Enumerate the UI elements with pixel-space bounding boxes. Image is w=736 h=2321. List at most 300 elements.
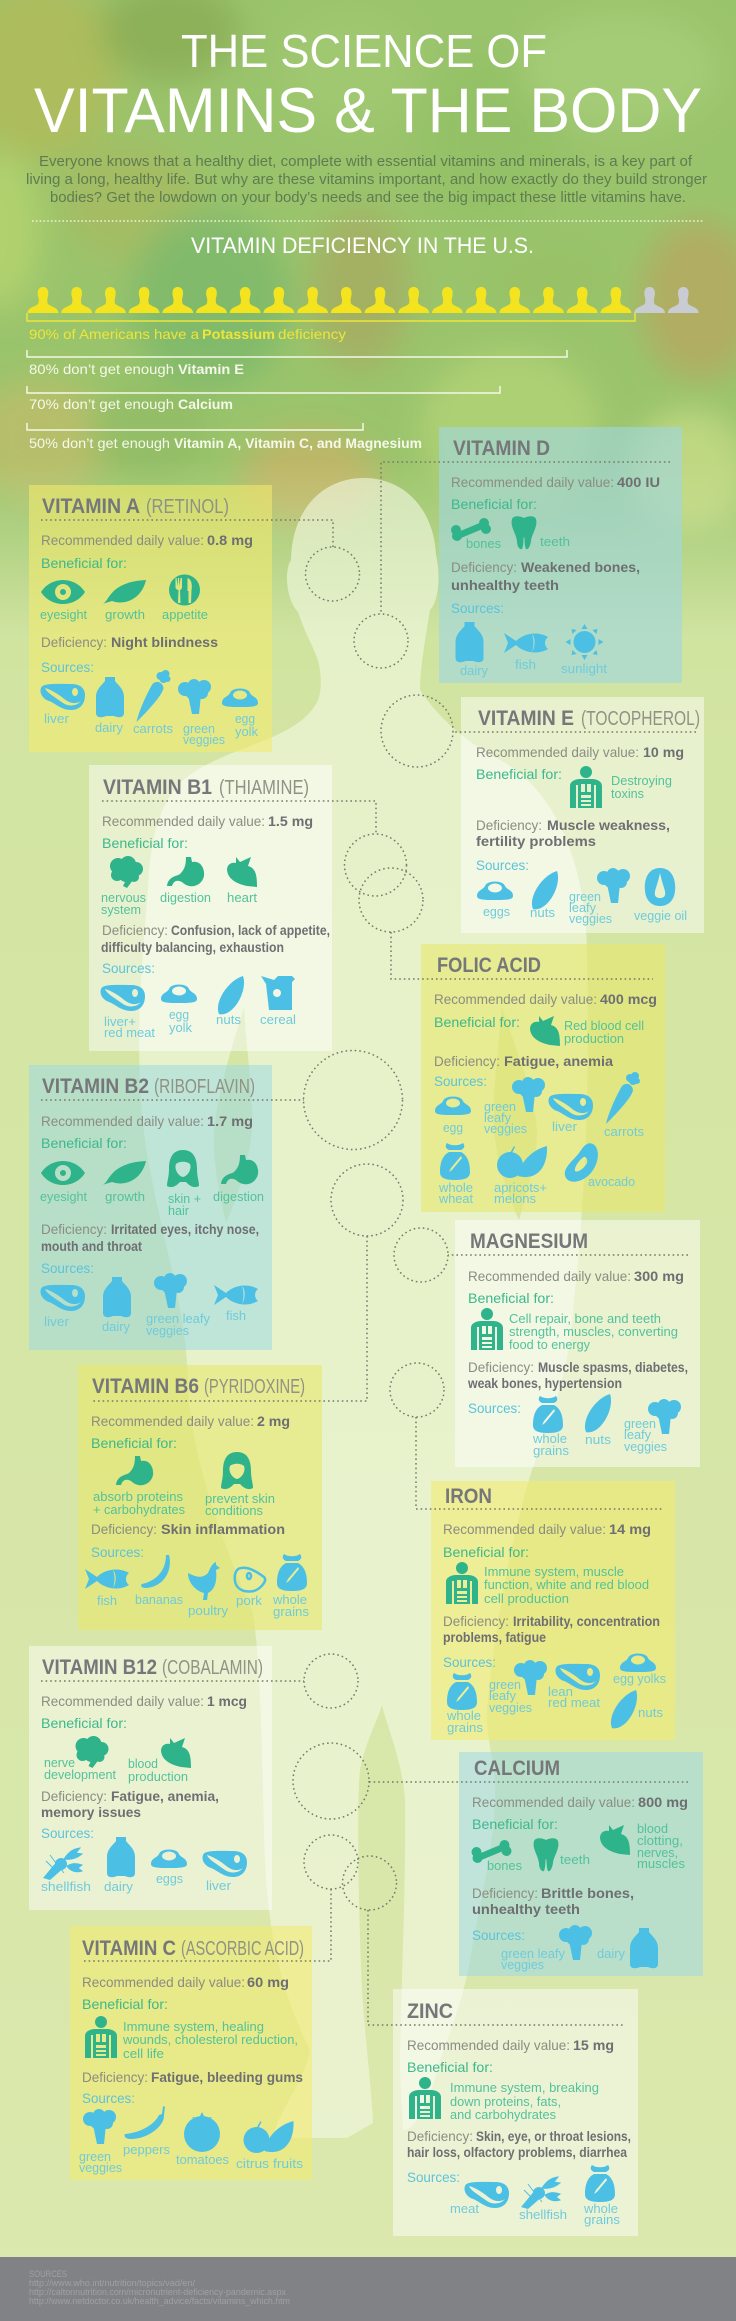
icon: green leafy veggies: green — [484, 1099, 516, 1114]
deficiency — [451, 559, 640, 593]
footer sources: http://caltonnutrition.com/micronutrient-deficiency-pandemic.aspx — [29, 2287, 286, 2297]
title: THE SCIENCE OF — [181, 25, 547, 77]
sources — [434, 1072, 644, 1206]
icon: bones — [472, 1840, 522, 1873]
icon: peppers: peppers — [123, 2142, 170, 2157]
icon: poultry: poultry — [188, 1603, 228, 1618]
benefits — [472, 1816, 685, 1873]
intro text — [26, 153, 707, 206]
recommended value: 0.8 mg — [207, 532, 253, 548]
icon: shellfish: shellfish — [41, 1879, 91, 1894]
icon: pork — [235, 1568, 265, 1608]
benefit text: down proteins, fats, — [450, 2094, 561, 2109]
icon: blood production: production — [128, 1769, 188, 1784]
benefits: Beneficial for: — [82, 1996, 168, 2012]
icon: apricots and melons — [494, 1146, 547, 1206]
icon: avocado — [565, 1143, 635, 1189]
benefits: Beneficial for: — [434, 1014, 520, 1030]
icon: liver — [40, 684, 85, 726]
deficiency — [41, 1788, 219, 1820]
benefits: Beneficial for: — [102, 835, 188, 851]
heading: CALCIUM — [474, 1757, 560, 1780]
deficiency: Deficiency: — [476, 817, 542, 833]
icon: shellfish: shellfish — [519, 2207, 567, 2222]
icon: apricots and melons: apricots+ — [494, 1180, 547, 1195]
benefit text: Red blood cell — [564, 1018, 644, 1033]
icon: bananas: bananas — [135, 1592, 183, 1607]
icon: green leafy veggies — [146, 1273, 210, 1338]
icon: body organs — [85, 2016, 117, 2058]
icon: green leafy veggies: leafy — [569, 900, 596, 915]
recommended value: Recommended daily value: — [41, 1113, 204, 1129]
icon: growth — [102, 1161, 146, 1204]
icon: whole grains: whole — [583, 2201, 618, 2216]
benefit text: and carbohydrates — [450, 2107, 556, 2122]
icon: blood clotting, nerves, muscles: muscles — [637, 1856, 685, 1871]
deficiency — [476, 817, 670, 849]
icon: prevent skin conditions: conditions — [205, 1503, 263, 1518]
recommended value: 400 mcg — [600, 991, 657, 1007]
icon: liver and red meat — [100, 985, 155, 1040]
icon: green leafy veggies: leafy — [484, 1110, 511, 1125]
benefit text: cell life — [123, 2046, 164, 2061]
icon: blood clotting, nerves, muscles: nerves, — [637, 1845, 678, 1860]
icon: liver and red meat: red meat — [104, 1025, 155, 1040]
icon: nuts: nuts — [638, 1705, 664, 1720]
benefit text — [564, 1018, 644, 1046]
deficiency: Night blindness — [111, 634, 218, 650]
deficiency — [472, 1885, 634, 1917]
footer sources — [29, 2269, 290, 2306]
icon: pork: pork — [236, 1593, 263, 1608]
recommended value: Recommended daily value: — [41, 1693, 204, 1709]
heading: (TOCOPHEROL) — [581, 708, 700, 730]
benefit text: food to energy — [509, 1337, 590, 1352]
recommended value: Recommended daily value: — [476, 744, 639, 760]
icon: egg yolk: yolk — [235, 724, 258, 739]
icon: body organs — [409, 2077, 441, 2119]
panel: vitamin B12 — [29, 1646, 272, 1910]
icon: cereal: cereal — [260, 1012, 296, 1027]
icon: liver: liver — [206, 1878, 232, 1893]
benefit text — [484, 1564, 649, 1606]
benefits — [40, 1135, 264, 1218]
icon: whole grains — [446, 1673, 483, 1735]
recommended value: Recommended daily value: — [472, 1794, 635, 1810]
benefit text: Cell repair, bone and teeth — [509, 1311, 661, 1326]
icon: liver and red meat: liver+ — [104, 1014, 136, 1029]
deficiency: Deficiency: — [451, 559, 517, 575]
intro text: Everyone knows that a healthy diet, complete with essential vitamins and minerals, is a key part of — [39, 153, 693, 170]
stat: 80% vitamin E: Vitamin E — [178, 361, 244, 377]
benefit text: strength, muscles, converting — [509, 1324, 678, 1339]
icon: green veggies — [79, 2109, 122, 2175]
icon: eggs: eggs — [156, 1871, 183, 1886]
dotted connectors and body-point circles — [41, 462, 696, 2025]
icon: green veggies — [178, 679, 225, 747]
icon: egg — [435, 1096, 471, 1135]
icon: skin and hair: skin + — [168, 1191, 201, 1206]
icon: liver: liver — [552, 1119, 578, 1134]
sources: Sources: — [41, 1825, 94, 1841]
icon: absorb proteins and carbohydrates: + carbohydrates — [93, 1502, 185, 1517]
icon: nerve development: nerve — [44, 1755, 75, 1770]
panel: vitamin B1 — [89, 765, 332, 1051]
panel: vitamin D — [439, 427, 682, 683]
heading: VITAMIN B6 — [92, 1375, 199, 1398]
panel: folic acid — [421, 944, 665, 1212]
stat: 70% calcium — [27, 386, 500, 412]
icon: nuts — [585, 1394, 612, 1447]
heading — [92, 1375, 305, 1398]
icon: dairy: dairy — [460, 663, 488, 678]
icon: green leafy veggies — [624, 1399, 681, 1454]
sources — [40, 659, 258, 747]
stat: 70% calcium: Calcium — [178, 396, 233, 412]
heading: (COBALAMIN) — [162, 1657, 263, 1679]
icon: eggs — [477, 882, 513, 919]
heading — [42, 495, 229, 518]
icon: green leafy veggies — [489, 1660, 547, 1715]
icon: fish: fish — [515, 657, 536, 672]
deficiency: Deficiency: — [407, 2128, 473, 2144]
icon: nuts: nuts — [216, 1012, 242, 1027]
sources — [472, 1925, 658, 1972]
sources — [100, 960, 296, 1040]
heading — [478, 707, 700, 730]
deficiency: Deficiency: — [434, 1053, 500, 1069]
benefit text — [611, 773, 672, 801]
deficiency — [91, 1521, 285, 1537]
deficiency: fertility problems — [476, 833, 596, 849]
heading — [82, 1937, 304, 1960]
recommended value: 1.7 mg — [207, 1113, 253, 1129]
deficiency: Muscle weakness, — [547, 817, 670, 833]
sources — [443, 1654, 666, 1735]
heading: (ASCORBIC ACID) — [181, 1938, 304, 1960]
icon: carrots: carrots — [133, 721, 173, 736]
recommended value: 300 mg — [634, 1268, 684, 1284]
icon: liver — [40, 1285, 85, 1329]
benefit text — [122, 2019, 298, 2061]
icon: green leafy veggies: green leafy — [146, 1311, 210, 1326]
sources: Sources: — [476, 857, 529, 873]
icon: cereal — [260, 976, 296, 1027]
title: VITAMINS & THE BODY — [34, 76, 702, 146]
sources — [41, 1825, 247, 1894]
heading: (RIBOFLAVIN) — [154, 1076, 255, 1098]
icon: nervous system: system — [101, 902, 141, 917]
icon: meat: meat — [450, 2201, 479, 2216]
benefit text: wounds, cholesterol reduction, — [122, 2032, 298, 2047]
icon: whole grains: whole — [446, 1708, 481, 1723]
icon: digestion — [213, 1155, 264, 1204]
deficiency: Weakened bones, — [521, 559, 640, 575]
heading — [42, 1656, 263, 1679]
recommended value: 400 IU — [617, 474, 660, 490]
deficiency: Deficiency: — [82, 2069, 148, 2085]
icon: digestion — [160, 857, 211, 905]
deficiency: problems, fatigue — [443, 1629, 546, 1645]
icon: sunlight — [561, 624, 607, 676]
icon: blood production — [128, 1738, 191, 1784]
icon: teeth — [534, 1838, 590, 1871]
icon: whole grains: grains — [447, 1720, 483, 1735]
recommended value: Recommended daily value: — [91, 1413, 254, 1429]
deficiency: Deficiency: — [41, 634, 107, 650]
heading — [42, 1075, 255, 1098]
icon: eyesight: eyesight — [40, 1189, 87, 1204]
benefits — [40, 555, 208, 622]
icon: meat — [450, 2182, 509, 2216]
recommended value: 1.5 mg — [268, 813, 313, 829]
icon: teeth: teeth — [540, 534, 570, 549]
deficiency — [407, 2128, 631, 2160]
icon: appetite — [162, 574, 208, 622]
recommended value: Recommended daily value: — [41, 532, 204, 548]
icon: growth: growth — [105, 1189, 145, 1204]
deficiency: Deficiency: — [41, 1221, 107, 1237]
icon: eggs: eggs — [483, 904, 510, 919]
recommended value: Recommended daily value: — [102, 813, 265, 829]
deficiency: Muscle spasms, diabetes, — [538, 1359, 688, 1375]
stat: 50% vitamins A, C, magnesium: Vitamin A, Vitamin C, and Magnesium — [174, 435, 422, 451]
icon: blood clotting, nerves, muscles: clotting, — [637, 1833, 683, 1848]
sources — [468, 1394, 681, 1458]
icon: whole wheat — [438, 1143, 473, 1206]
benefits: Beneficial for: — [451, 496, 537, 512]
panel: vitamin B2 — [29, 1065, 272, 1350]
icon: whole wheat: whole — [438, 1180, 473, 1195]
panel: vitamin B6 — [78, 1365, 322, 1630]
heading: VITAMIN E — [478, 707, 574, 730]
heading: ZINC — [407, 2000, 453, 2023]
heading: VITAMIN B12 — [42, 1656, 157, 1679]
icon: veggie oil: veggie oil — [634, 908, 687, 923]
icon: growth: growth — [105, 607, 145, 622]
benefits: Beneficial for: — [41, 1715, 127, 1731]
icon: skin and hair: hair — [168, 1203, 190, 1218]
icon: blood clotting, nerves, muscles: blood — [637, 1821, 668, 1836]
icon: peppers — [123, 2106, 170, 2157]
intro text: bodies? Get the lowdown on your body’s needs and see the big impact these little vitamins have. — [50, 189, 686, 206]
icon: growth — [102, 580, 146, 622]
icon: dairy: dairy — [95, 720, 123, 735]
recommended value: 1 mcg — [207, 1693, 247, 1709]
benefits: Beneficial for: — [476, 766, 562, 782]
benefits — [101, 835, 257, 917]
icon: bananas — [135, 1555, 183, 1607]
stat: 80% vitamin E: 80% don’t get enough — [29, 361, 174, 377]
benefits: Beneficial for: — [443, 1544, 529, 1560]
icon: eyesight — [40, 580, 87, 622]
sources: Sources: — [468, 1400, 521, 1416]
heading: (RETINOL) — [146, 496, 229, 518]
icon: heart: heart — [227, 890, 257, 905]
icon: eyesight: eyesight — [40, 607, 87, 622]
sources — [40, 1260, 258, 1338]
panel: magnesium — [455, 1220, 700, 1467]
icon: green leafy veggies: green — [489, 1677, 521, 1692]
benefits: Beneficial for: — [91, 1435, 177, 1451]
footer sources: http://www.netdoctor.co.uk/health_advice/facts/vitamins_which.htm — [29, 2296, 290, 2306]
icon: nervous system: nervous — [101, 890, 146, 905]
icon: veggie oil — [634, 868, 687, 923]
sources: Sources: — [434, 1073, 487, 1089]
icon: egg yolk: egg — [169, 1007, 189, 1022]
icon: egg: egg — [443, 1120, 463, 1135]
sources: Sources: — [102, 960, 155, 976]
icon: dairy — [456, 622, 488, 678]
deficiency — [41, 634, 218, 650]
sources: Sources: — [407, 2169, 460, 2185]
section heading: VITAMIN DEFICIENCY IN THE U.S. — [191, 233, 534, 258]
icon: carrots — [133, 670, 173, 736]
heading: VITAMIN B1 — [103, 776, 212, 799]
benefits: Beneficial for: — [41, 1135, 127, 1151]
benefit text: Immune system, muscle — [484, 1564, 624, 1579]
icon: apricots and melons: melons — [494, 1191, 536, 1206]
panel: calcium — [459, 1752, 703, 1976]
stat: 50% vitamins A, C, magnesium — [27, 423, 422, 451]
benefit text: Immune system, breaking — [450, 2080, 599, 2095]
icon: absorb proteins and carbohydrates — [93, 1456, 185, 1517]
icon: dairy — [104, 1837, 135, 1894]
heading: VITAMIN B2 — [42, 1075, 149, 1098]
heading: (PYRIDOXINE) — [204, 1376, 305, 1398]
icon: citrus fruits: citrus fruits — [236, 2156, 304, 2171]
panel: zinc — [393, 1989, 638, 2236]
body silhouette — [139, 478, 588, 2138]
heading: MAGNESIUM — [470, 1230, 588, 1253]
intro text: living a long, healthy life. But why are these vitamins important, and how exactly do they build stronger — [26, 171, 707, 188]
icon: green leafy veggies: veggies — [624, 1439, 667, 1454]
icon: liver — [548, 1094, 593, 1134]
icon: fish — [504, 633, 548, 672]
benefits — [468, 1290, 678, 1352]
benefit text: Destroying — [611, 773, 672, 788]
deficiency: Deficiency: — [443, 1613, 509, 1629]
icon: whole grains — [532, 1396, 569, 1458]
icon: dairy — [597, 1928, 658, 1968]
icon: bones: bones — [466, 536, 501, 551]
benefit text: function, white and red blood — [484, 1577, 649, 1592]
sources — [85, 1544, 309, 1619]
icon: nuts — [611, 1690, 664, 1728]
recommended value: Recommended daily value: — [443, 1521, 606, 1537]
icon: heart — [227, 857, 257, 905]
stat: 90% potassium: deficiency — [278, 326, 346, 342]
icon: green leafy veggies: green leafy — [501, 1946, 565, 1961]
icon: body organs — [570, 766, 602, 808]
icon: prevent skin conditions — [205, 1452, 275, 1518]
deficiency: Skin inflammation — [161, 1521, 285, 1537]
deficiency — [101, 922, 330, 955]
icon: whole grains: grains — [273, 1604, 309, 1619]
sources: Sources: — [82, 2090, 135, 2106]
icon: liver: liver — [44, 711, 70, 726]
heading: (THIAMINE) — [219, 777, 309, 799]
deficiency: Irritated eyes, itchy nose, — [111, 1221, 259, 1237]
icon: green leafy veggies: green — [569, 889, 601, 904]
recommended value: Recommended daily value: — [451, 474, 614, 490]
deficiency: Fatigue, anemia — [504, 1053, 613, 1069]
recommended value: 10 mg — [643, 744, 684, 760]
icon: nervous system — [101, 856, 146, 917]
icon: green leafy veggies: leafy — [624, 1427, 651, 1442]
deficiency: unhealthy teeth — [472, 1901, 580, 1917]
deficiency: Deficiency: — [472, 1885, 538, 1901]
icon: blood production: blood — [128, 1756, 158, 1771]
benefits — [91, 1435, 275, 1518]
deficiency: difficulty balancing, exhaustion — [101, 939, 284, 955]
benefit text: production — [564, 1031, 624, 1046]
benefits — [82, 1996, 298, 2061]
stat: 50% vitamins A, C, magnesium: 50% don’t get enough — [29, 435, 170, 451]
sources: Sources: — [41, 1260, 94, 1276]
icon: lean red meat: red meat — [548, 1695, 600, 1710]
recommended value: 15 mg — [573, 2037, 614, 2053]
icon: teeth: teeth — [560, 1852, 590, 1867]
icon: carrots: carrots — [604, 1124, 644, 1139]
benefit text — [450, 2080, 599, 2122]
benefits: Beneficial for: — [468, 1290, 554, 1306]
icon: body organs — [446, 1562, 478, 1604]
panel: vitamin C — [70, 1926, 312, 2180]
recommended value: 2 mg — [257, 1413, 290, 1429]
icon: egg yolk — [222, 688, 258, 739]
benefit text: cell production — [484, 1591, 569, 1606]
recommended value: 60 mg — [247, 1974, 289, 1990]
icon: egg yolk: yolk — [169, 1020, 192, 1035]
icon: egg yolks — [613, 1654, 666, 1686]
icon: eyesight — [40, 1161, 87, 1204]
icon: poultry — [188, 1562, 228, 1618]
deficiency — [434, 1053, 613, 1069]
stat: 80% vitamin E — [27, 350, 567, 377]
stat: 70% calcium: 70% don’t get enough — [29, 396, 174, 412]
icon: lean red meat: lean — [548, 1684, 573, 1699]
deficiency: Deficiency: — [102, 922, 168, 938]
icon: fish: fish — [97, 1593, 117, 1608]
icon: egg yolk: egg — [235, 711, 255, 726]
icon: fish: fish — [226, 1308, 246, 1323]
icon: tomatoes: tomatoes — [176, 2152, 229, 2167]
sources — [407, 2165, 620, 2227]
deficiency: Deficiency: — [468, 1359, 534, 1375]
icon: nuts: nuts — [585, 1432, 612, 1447]
deficiency — [443, 1613, 660, 1645]
icon: dairy — [95, 677, 124, 735]
icon: egg yolk — [161, 984, 197, 1035]
recommended value: 14 mg — [609, 1521, 651, 1537]
icon: appetite: appetite — [162, 607, 208, 622]
icon: dairy — [102, 1277, 131, 1334]
deficiency — [467, 1359, 688, 1391]
icon: tomatoes — [176, 2112, 229, 2167]
stat: 90% potassium — [27, 313, 635, 342]
heading: IRON — [445, 1485, 492, 1508]
heading: VITAMIN C — [82, 1937, 176, 1960]
footer sources: SOURCES — [29, 2269, 67, 2279]
icon: green leafy veggies — [484, 1077, 545, 1136]
deficiency — [41, 1221, 259, 1254]
recommended value: Recommended daily value: — [82, 1974, 245, 1990]
icon: whole grains — [583, 2165, 620, 2227]
deficiency: Brittle bones, — [541, 1885, 634, 1901]
panel: vitamin E — [461, 697, 704, 933]
icon: green leafy veggies — [501, 1925, 592, 1972]
